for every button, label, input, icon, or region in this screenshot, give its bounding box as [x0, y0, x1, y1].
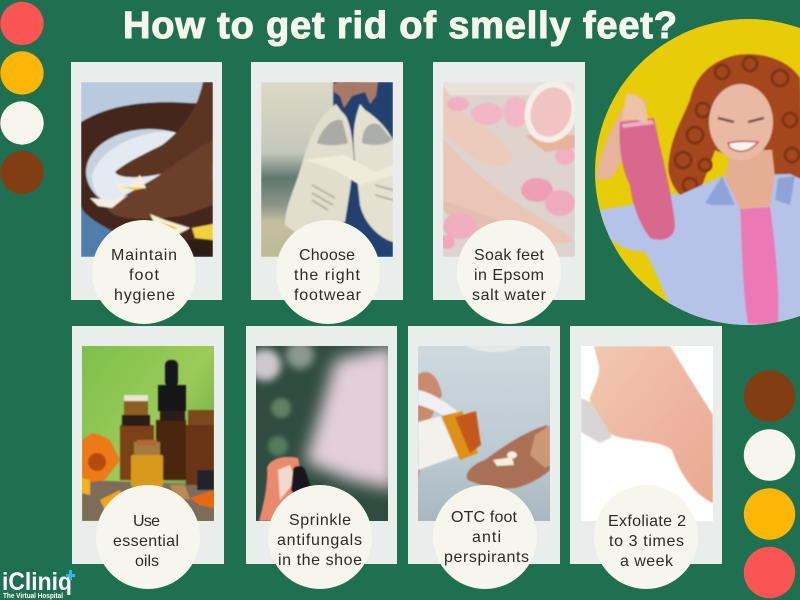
shirt	[600, 174, 800, 330]
label circle: Exfoliate 2	[608, 513, 686, 530]
label circle: hygiene	[114, 287, 175, 304]
face	[709, 84, 773, 160]
panel: soak feet in Epsom salt water	[433, 62, 585, 324]
hair	[668, 54, 800, 205]
label circle: essential	[113, 533, 179, 550]
label circle: Soak feet	[474, 247, 545, 264]
label circle: in Epsom	[474, 267, 544, 284]
photo: essential oil bottles	[82, 346, 214, 521]
palette dots: right	[744, 370, 795, 598]
label circle	[276, 220, 380, 324]
pink tee	[740, 207, 778, 324]
panel: exfoliate 2 to 3 times a week	[570, 326, 722, 589]
label circle	[433, 485, 537, 589]
panel: maintain foot hygiene	[71, 62, 222, 324]
photo: feet with rose petals	[443, 82, 575, 257]
label circle	[92, 220, 196, 324]
title: How to get rid of smelly feet?	[123, 5, 677, 47]
label circle: to 3 times	[609, 533, 684, 550]
sock	[619, 118, 675, 240]
label circle: oils	[135, 553, 159, 570]
label circle	[96, 485, 200, 589]
label circle: the right	[294, 267, 361, 284]
palette dots: left	[0, 2, 44, 194]
label circle	[457, 220, 561, 324]
panel: OTC foot anti perspirants	[408, 326, 560, 589]
hero photo: woman holding a smelly sock	[590, 15, 800, 330]
label circle: Choose	[299, 247, 355, 264]
label circle: Use	[133, 513, 160, 530]
icon: blue plus	[66, 570, 75, 580]
label circle: antifungals	[277, 532, 362, 549]
label circle: foot	[129, 267, 160, 284]
label circle	[268, 485, 372, 589]
photo: white shoes	[261, 82, 393, 257]
label circle: OTC foot	[451, 509, 518, 526]
label circle: perspirants	[444, 549, 529, 566]
panel: choose the right footwear	[251, 62, 403, 324]
logo: iCliniq: iCliniq	[2, 568, 72, 596]
photo: feet in a bowl	[81, 82, 214, 257]
photo: heel and pumice stone	[581, 346, 713, 521]
label circle: anti	[472, 529, 501, 546]
label circle	[594, 485, 698, 589]
label circle: Maintain	[111, 247, 177, 264]
photo: spray bottle mist	[256, 346, 388, 521]
raised arm and hand	[596, 98, 647, 180]
label circle: salt water	[472, 287, 547, 304]
panel: use essential oils	[72, 326, 224, 589]
logo: iCliniq: The Virtual Hospital	[3, 593, 63, 600]
label circle: footwear	[294, 287, 362, 304]
label circle: a week	[620, 553, 674, 570]
label circle: Sprinkle	[289, 512, 351, 529]
label circle: in the shoe	[278, 552, 362, 569]
panel: sprinkle antifungals in the shoe	[246, 326, 397, 589]
neck	[725, 150, 775, 209]
photo: pills poured in hand	[418, 346, 550, 521]
